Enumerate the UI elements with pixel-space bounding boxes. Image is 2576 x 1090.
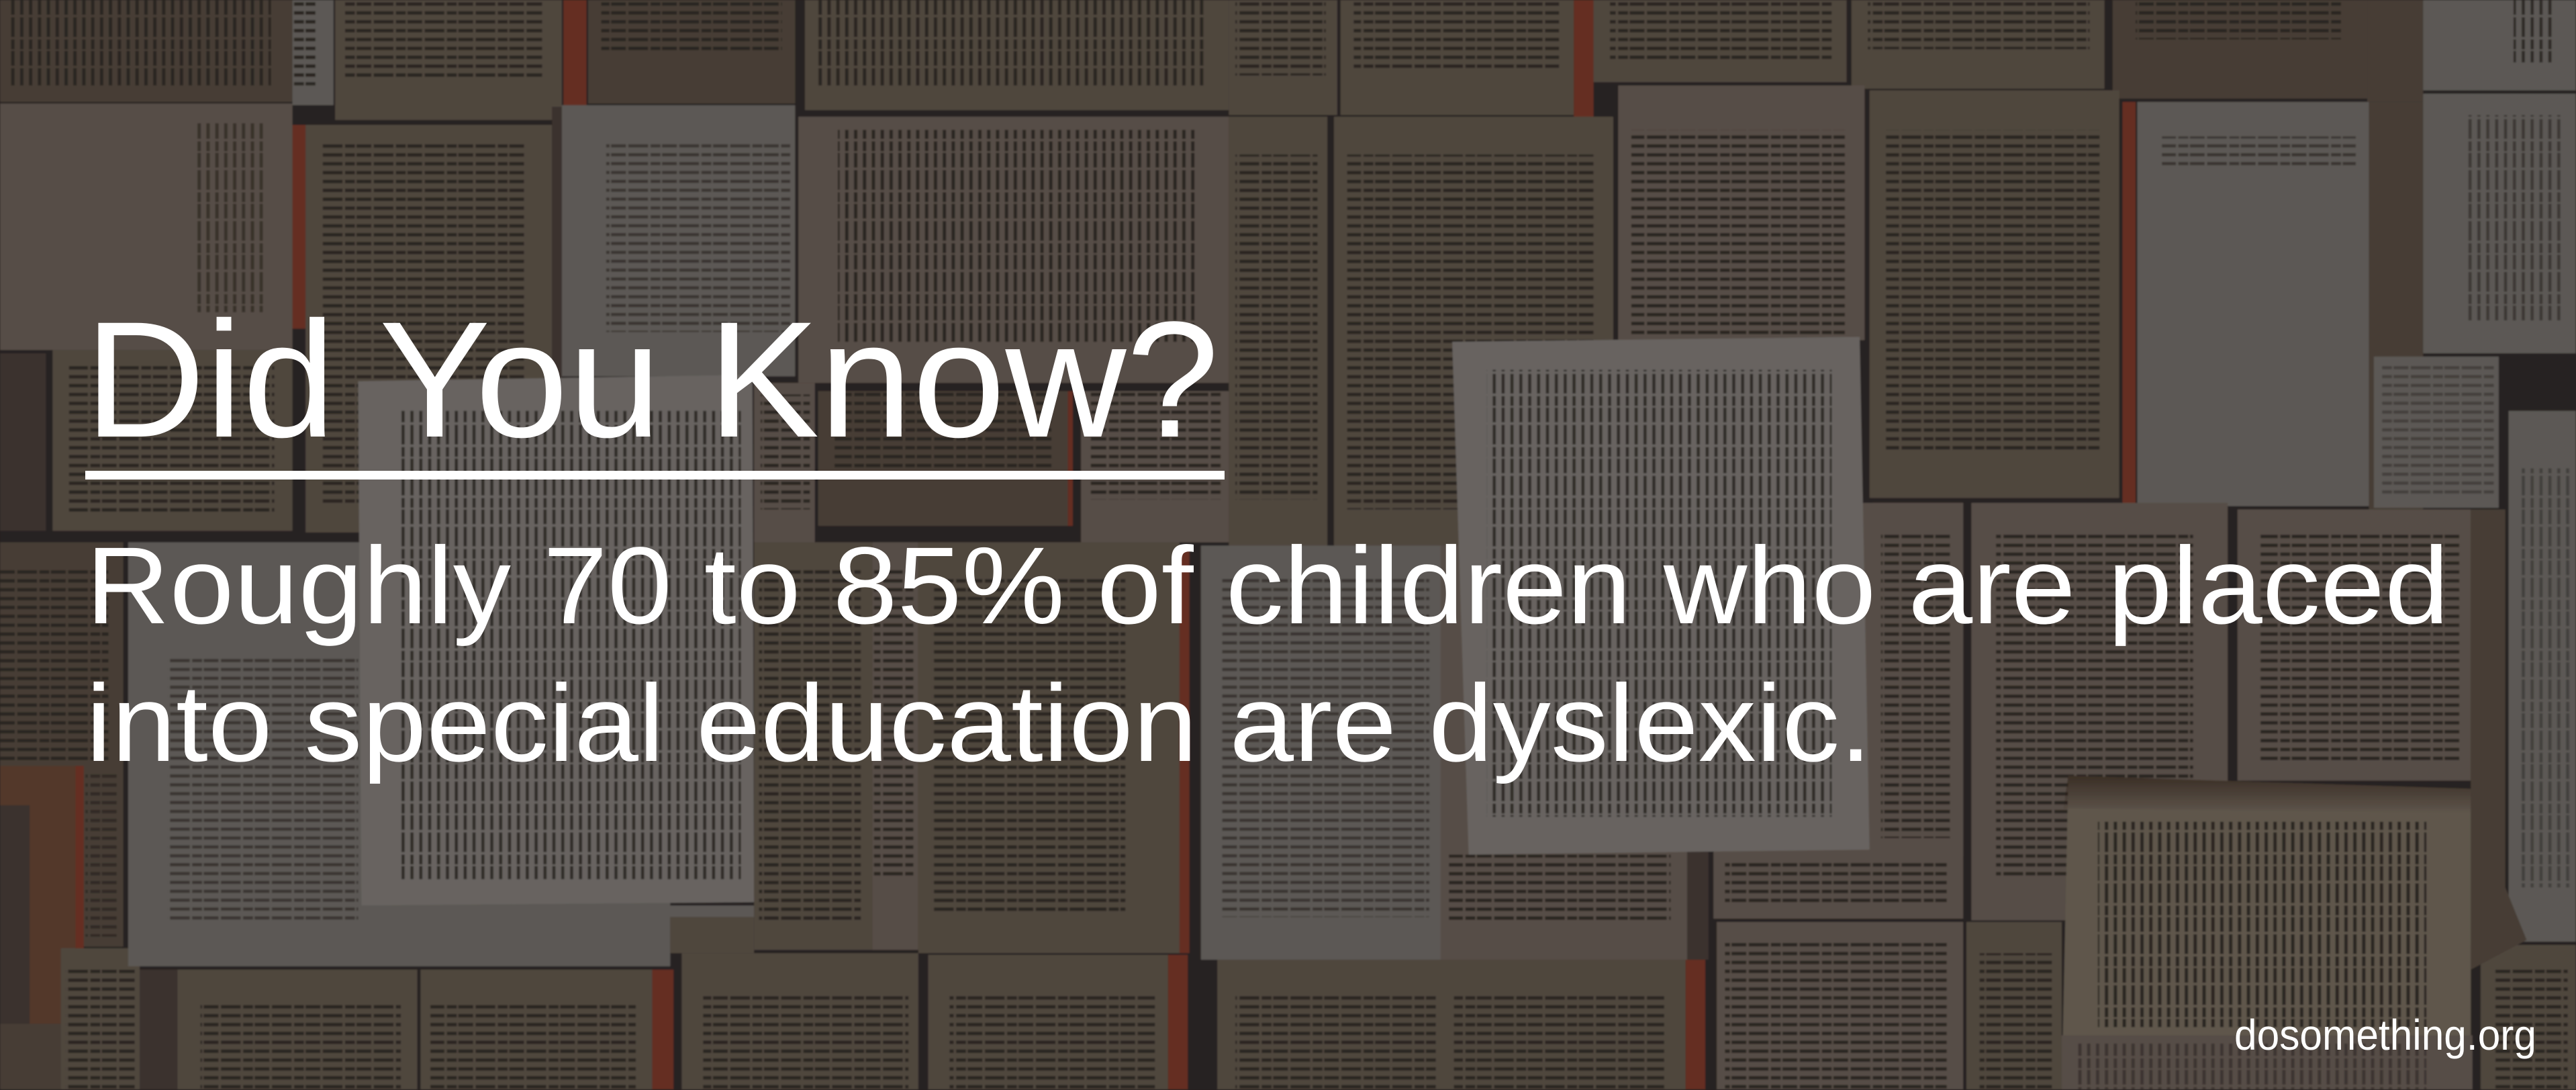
title: Did You Know? [85, 287, 1219, 472]
body text [86, 524, 2449, 784]
title underline [85, 471, 1225, 480]
footer url: dosomething.org [2234, 1011, 2536, 1059]
body text: into special education are dyslexic. [86, 662, 1872, 784]
body text: Roughly 70 to 85% of children who are placed [86, 524, 2449, 647]
